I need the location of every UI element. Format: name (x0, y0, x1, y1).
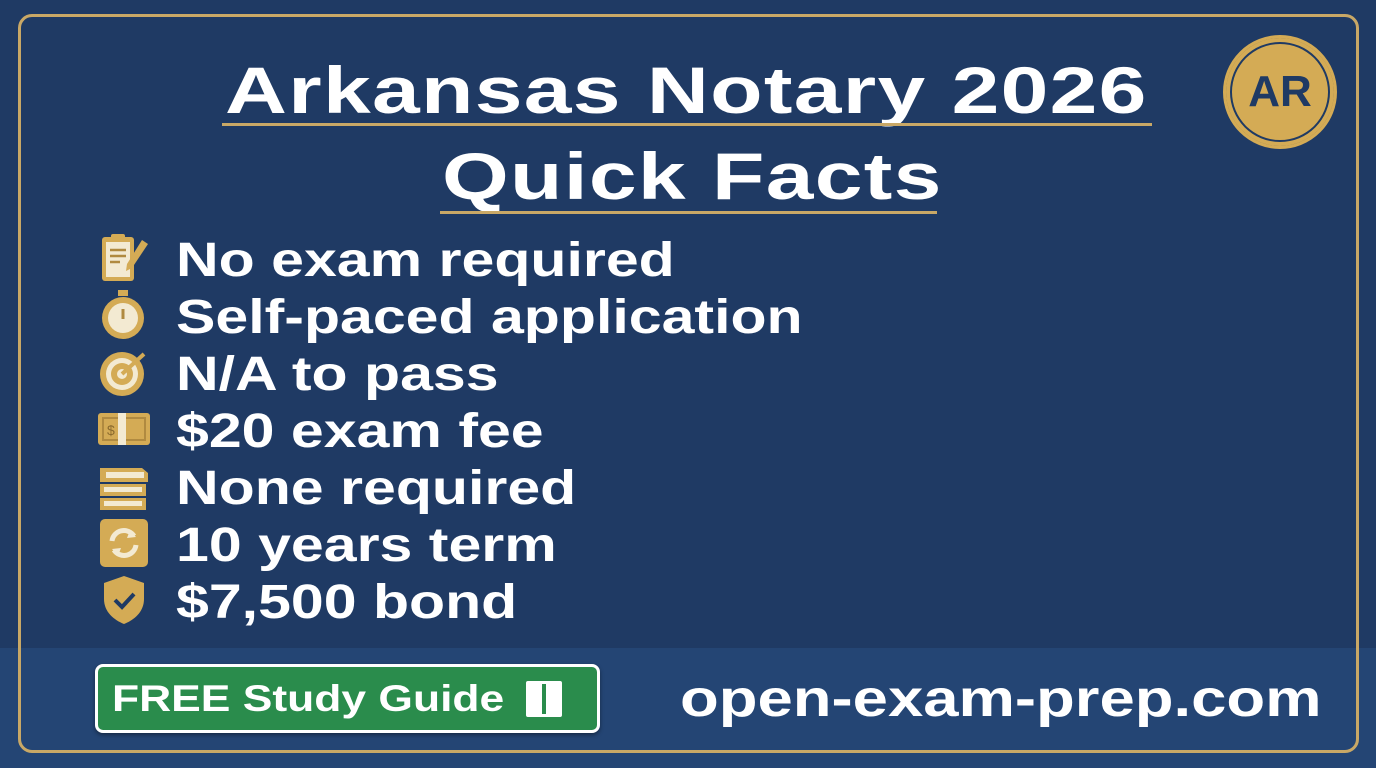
badge: AR (1223, 35, 1337, 149)
item 2: Self-paced application (176, 291, 803, 344)
item 3: N/A to pass (176, 348, 499, 401)
icon: stopwatch (102, 290, 144, 339)
icon: target (100, 352, 146, 396)
button: free study guide: FREE Study Guide (112, 678, 504, 719)
icon: books (100, 468, 148, 510)
item 7: $7,500 bond (176, 576, 517, 629)
icon: clipboard (102, 234, 148, 281)
title line 2: Quick Facts (442, 139, 943, 213)
badge: AR: AR (1248, 67, 1312, 116)
button: free study guide (95, 664, 600, 733)
title line 1: Arkansas Notary 2026 (225, 53, 1148, 127)
icon: renew (100, 519, 148, 567)
icon: money: $ (107, 422, 115, 438)
item 1: No exam required (176, 234, 675, 287)
item 6: 10 years term (176, 519, 557, 572)
url: open-exam-prep.com (680, 670, 1322, 728)
item 4: $20 exam fee (176, 405, 544, 458)
icon: shield (104, 576, 144, 624)
icon: money (98, 413, 150, 445)
item 5: None required (176, 462, 576, 515)
icon: book (526, 681, 562, 717)
